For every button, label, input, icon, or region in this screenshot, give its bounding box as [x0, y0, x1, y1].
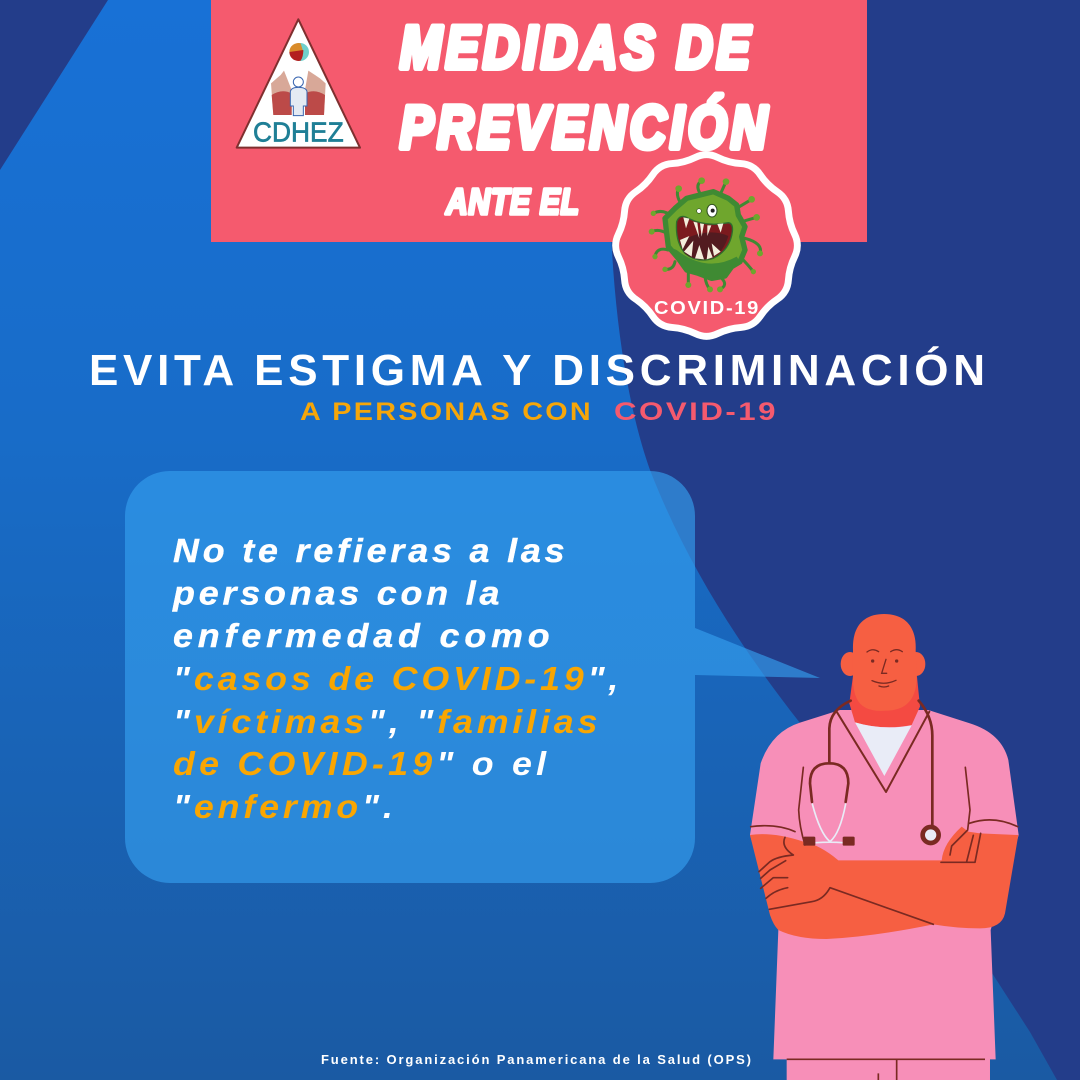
badge: covid-19: COVID-19	[654, 298, 760, 318]
neck	[849, 673, 920, 727]
subheading	[300, 398, 778, 426]
heading: EVITA ESTIGMA Y DISCRIMINACIÓN	[89, 345, 985, 395]
scrub top	[750, 710, 1019, 1059]
bubble message: de COVID-19" o el	[173, 746, 550, 783]
face	[867, 650, 902, 687]
arms	[750, 827, 1018, 939]
speech bubble	[125, 471, 820, 883]
source note: Fuente: Organización Panamericana de la Salud (OPS)	[321, 1052, 751, 1067]
bubble message: enfermedad como	[173, 618, 555, 655]
subtitle: ante el: ANTE EL	[445, 182, 579, 223]
title: medidas de prevención: MEDIDAS DE	[400, 14, 752, 81]
bubble message: "casos de COVID-19",	[173, 661, 622, 698]
bubble message: personas con la	[172, 576, 503, 612]
undershirt	[855, 722, 912, 776]
badge: covid-19	[616, 155, 797, 336]
illustration: nurse	[750, 614, 1019, 1080]
subheading: COVID-19	[614, 398, 778, 426]
logo: CDHEZ	[237, 19, 360, 148]
head	[841, 614, 925, 711]
bubble message: "enfermo".	[173, 789, 397, 826]
clothing and arm lines	[751, 712, 1018, 924]
bubble message: No te refieras a las	[173, 533, 568, 570]
bubble message: "víctimas", "familias	[173, 704, 601, 741]
trousers	[787, 1057, 990, 1080]
header banner	[211, 0, 867, 242]
title: medidas de prevención: PREVENCIÓN	[400, 94, 768, 161]
subheading: A PERSONAS CON	[300, 398, 593, 426]
icon: virus	[649, 177, 763, 292]
logo: CDHEZ: CDHEZ	[253, 117, 344, 148]
trouser lines	[787, 1059, 985, 1080]
bubble message	[172, 533, 622, 826]
title: medidas de prevención	[400, 14, 768, 161]
stethoscope	[803, 701, 939, 846]
